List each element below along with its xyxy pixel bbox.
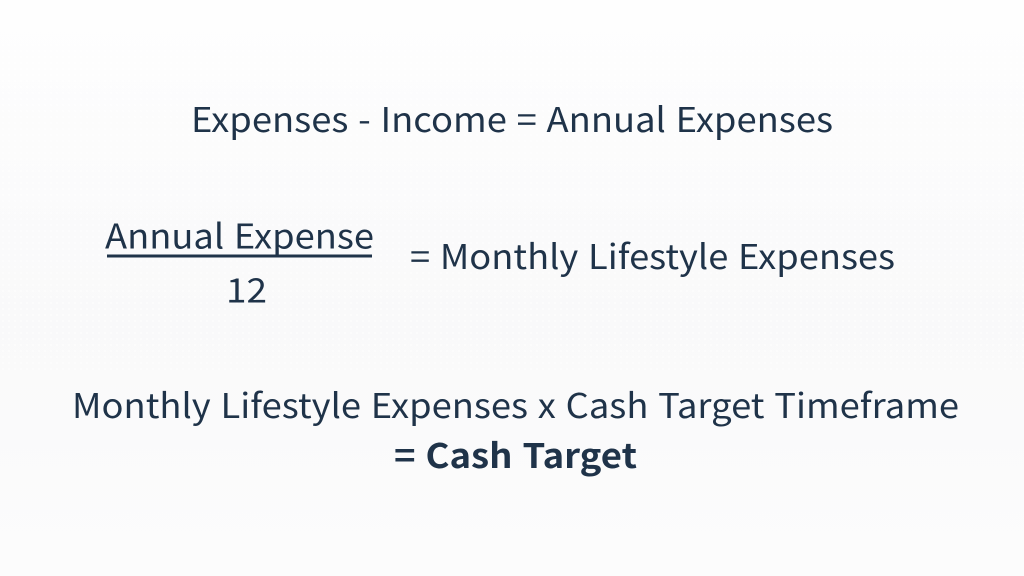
formula 3 result: = Cash Target xyxy=(394,429,637,478)
formula 1: annual expenses: Expenses - Income = Annual Expenses xyxy=(191,93,833,142)
fraction result: = Monthly Lifestyle Expenses xyxy=(410,230,895,279)
formula 3: cash target xyxy=(72,379,959,478)
fraction denominator: 12 xyxy=(226,264,267,312)
formula 3 first line: Monthly Lifestyle Expenses x Cash Target Timeframe xyxy=(72,379,959,428)
formula 2: monthly lifestyle expenses xyxy=(105,210,895,312)
fraction numerator: Annual Expense xyxy=(105,210,374,258)
fraction bar xyxy=(107,254,372,258)
